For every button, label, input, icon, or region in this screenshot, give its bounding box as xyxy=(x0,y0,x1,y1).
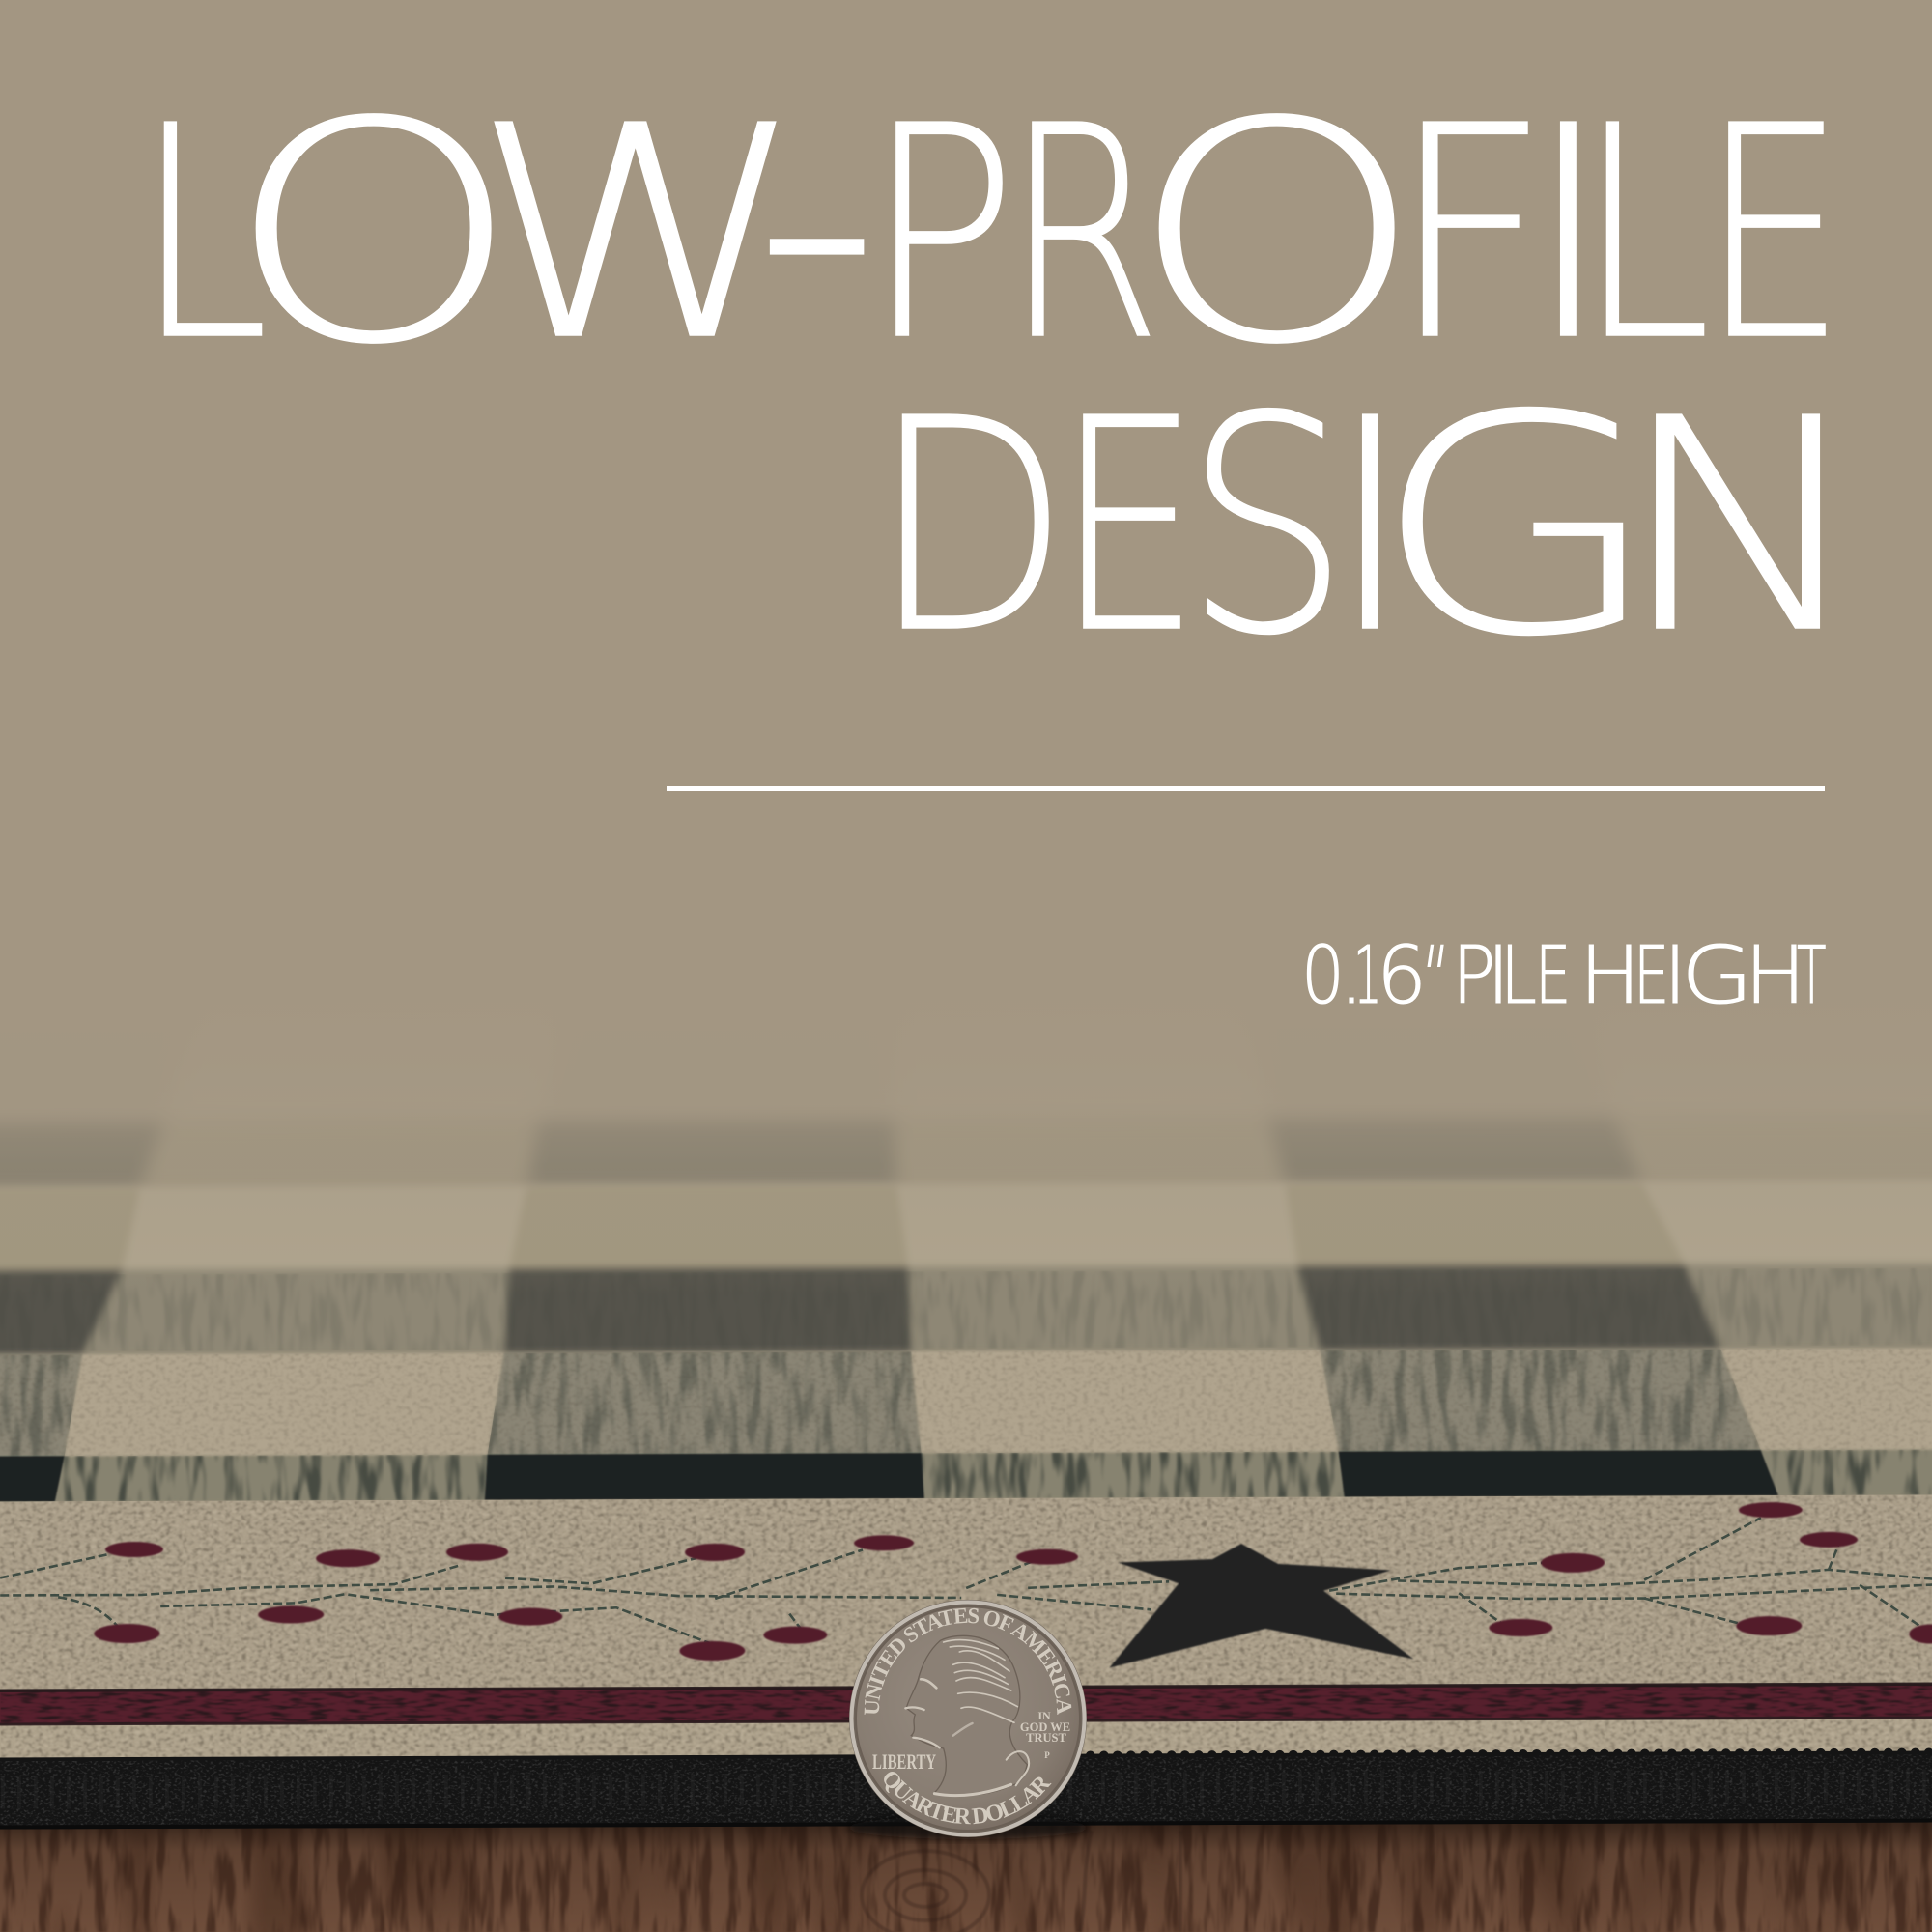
text: D xyxy=(871,357,1069,697)
text: I xyxy=(1327,357,1413,697)
dark plaid row, blurred xyxy=(0,1115,1932,1192)
coin inscription: P xyxy=(1044,1750,1050,1760)
text: 0 xyxy=(1301,930,1345,1022)
text: P xyxy=(866,64,1017,404)
text: - xyxy=(753,17,880,426)
text: L xyxy=(135,64,269,404)
text: W xyxy=(471,64,808,404)
title: LOW-PROFILE xyxy=(135,17,1845,426)
text: T xyxy=(1797,930,1827,1022)
dark plaid blocks at rug front xyxy=(0,1450,1778,1502)
text: 1 xyxy=(1353,930,1382,1022)
title: DESIGN xyxy=(871,352,1871,702)
text: N xyxy=(1615,357,1871,697)
text: R xyxy=(1005,64,1161,404)
fade of rug into background xyxy=(0,966,1932,1294)
far plaid row, heavy blur xyxy=(0,991,1932,1124)
text: O xyxy=(1129,58,1424,411)
wood floor xyxy=(0,1806,1932,1932)
text: G xyxy=(1681,930,1753,1022)
text: O xyxy=(226,58,521,411)
text: I xyxy=(1525,64,1611,404)
text: . xyxy=(1339,930,1364,1022)
rug: lower beige strip xyxy=(0,1716,1932,1760)
text: I xyxy=(1663,930,1687,1022)
subheading: pile height xyxy=(1301,930,1827,1022)
text: E xyxy=(1056,357,1200,697)
text: E xyxy=(1634,930,1669,1022)
coin inscription: UNITED STATES OF AMERICA xyxy=(864,1607,1072,1715)
text: I xyxy=(1487,930,1510,1022)
rug: beige band xyxy=(0,1494,1932,1691)
berries xyxy=(94,1501,1932,1662)
text: L xyxy=(1577,64,1711,404)
text: P xyxy=(1452,930,1495,1022)
text: S xyxy=(1184,354,1350,700)
coin inscription: IN xyxy=(1037,1709,1051,1722)
text: L xyxy=(1500,930,1537,1022)
coin inscription: QUARTER DOLLAR xyxy=(884,1772,1051,1824)
photo background: rug on wood floor with coin xyxy=(0,1117,1932,1932)
divider rule xyxy=(667,786,1825,791)
coin inscription: GOD WE xyxy=(1020,1720,1070,1734)
coin inscription: LIBERTY xyxy=(872,1749,936,1774)
burgundy stripe xyxy=(0,1682,1932,1726)
text: H xyxy=(1745,930,1806,1022)
Washington profile xyxy=(905,1635,1029,1796)
middle plaid rows, soft focus xyxy=(0,1180,1932,1357)
woven texture over band xyxy=(0,1495,1932,1759)
quarter coin xyxy=(847,1600,1088,1843)
text: F xyxy=(1389,64,1550,404)
text: 6 xyxy=(1377,930,1427,1022)
text: H xyxy=(1579,930,1641,1022)
text: " xyxy=(1413,930,1452,1022)
coin inscription xyxy=(864,1607,1072,1824)
near plaid rows xyxy=(0,1348,1932,1503)
star xyxy=(1109,1543,1413,1667)
text: E xyxy=(1535,930,1571,1022)
black rug border xyxy=(0,1750,1932,1830)
text: E xyxy=(1701,64,1845,404)
text: G xyxy=(1372,352,1662,702)
coin inscription: TRUST xyxy=(1026,1731,1066,1745)
vine stems xyxy=(0,1518,1932,1645)
rug: plaid rows and printed band xyxy=(0,1117,1932,1830)
